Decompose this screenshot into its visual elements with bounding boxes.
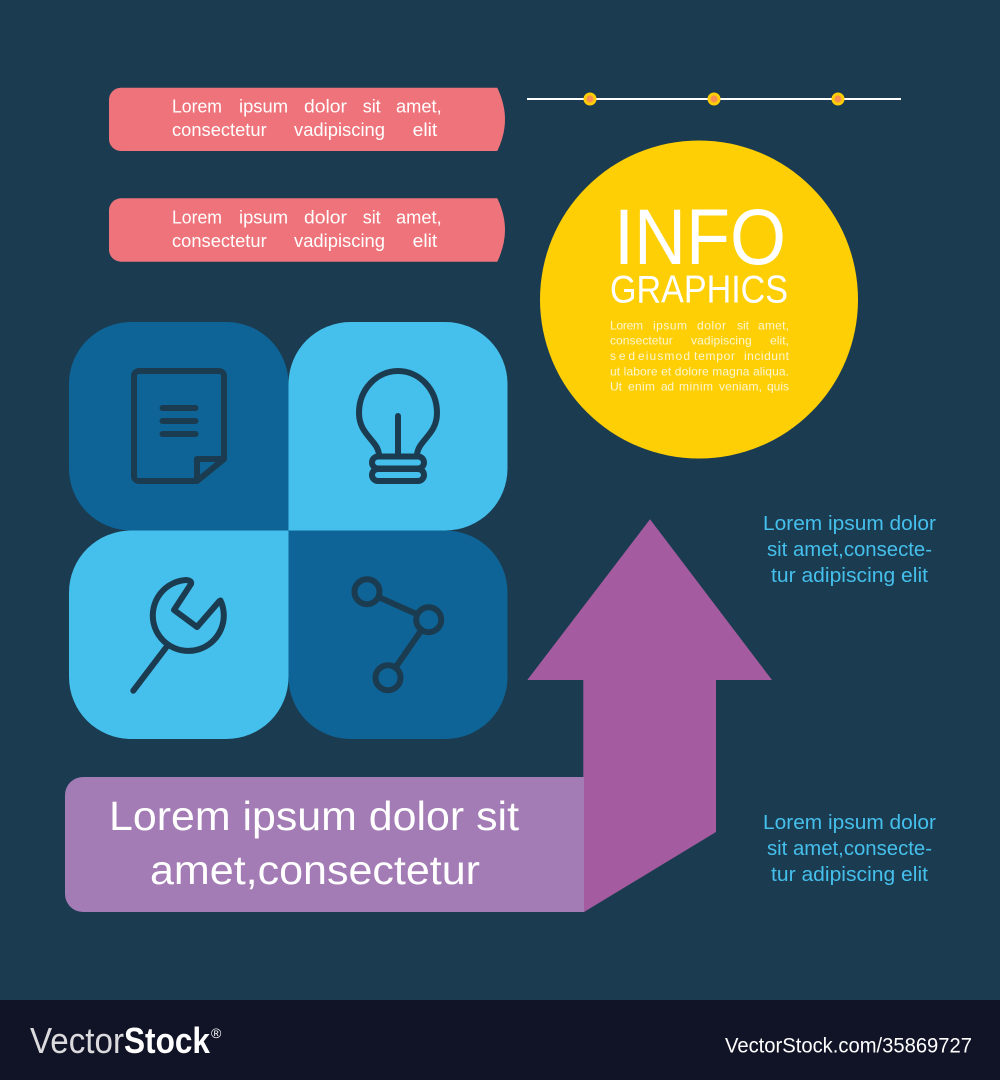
circle body text: dolor bbox=[697, 318, 726, 332]
circle body text: ut labore et dolore magna aliqua. bbox=[610, 364, 789, 378]
banner: top pink text bar: vadipiscing bbox=[294, 120, 385, 140]
image id: VectorStock.com/35869727 bbox=[725, 1035, 972, 1058]
circle body text: incidunt bbox=[744, 349, 790, 363]
circle body text: sed bbox=[610, 349, 635, 363]
circle body text: vadipiscing bbox=[691, 334, 752, 348]
logo wordmark: ® bbox=[211, 1025, 222, 1041]
banner: second pink text bar bbox=[109, 198, 505, 262]
banner: top pink text bar: ipsum bbox=[239, 97, 288, 117]
banner: purple lower label bbox=[65, 777, 584, 912]
footer bar bbox=[0, 1000, 1000, 1080]
banner: second pink text bar: vadipiscing bbox=[294, 231, 385, 251]
circle body text: tempor bbox=[694, 349, 735, 363]
icon: wrench bbox=[133, 580, 224, 691]
circle body text: consectetur bbox=[610, 334, 673, 348]
circle body text: eiusmod bbox=[638, 349, 690, 363]
subtitle: GRAPHICS: GRAPHICS bbox=[610, 269, 788, 312]
banner: second pink text bar: Lorem bbox=[172, 208, 222, 228]
banner: second pink text bar: ipsum bbox=[239, 208, 288, 228]
banner: top pink text bar: elit bbox=[413, 120, 437, 140]
banner: second pink text bar: elit bbox=[413, 231, 437, 251]
banner: second pink text bar: consectetur bbox=[172, 231, 267, 251]
banner: top pink text bar bbox=[109, 88, 505, 151]
panel: share nodes tile bbox=[288, 530, 508, 739]
circle body text: amet, bbox=[758, 318, 789, 332]
text block: upper blue caption: tur adipiscing elit bbox=[771, 565, 928, 587]
title: INFO: INFO bbox=[614, 192, 786, 281]
circle body text: ad bbox=[661, 380, 674, 394]
text block: upper blue caption bbox=[763, 513, 936, 587]
icon: document bbox=[134, 371, 224, 481]
logo wordmark: Stock bbox=[124, 1020, 211, 1061]
circle body text: enim bbox=[628, 380, 655, 394]
banner: top pink text bar: sit bbox=[363, 97, 381, 117]
banner: second pink text bar: dolor bbox=[304, 208, 347, 228]
icon: share nodes bbox=[354, 579, 441, 690]
circle body text: ipsum bbox=[653, 318, 687, 332]
panel: wrench tile bbox=[69, 530, 288, 739]
banner: top pink text bar: amet, bbox=[396, 97, 442, 117]
circle body text bbox=[610, 318, 790, 394]
circle body text: sit bbox=[737, 318, 750, 332]
banner: second pink text bar: amet, bbox=[396, 208, 442, 228]
text block: lower blue caption bbox=[763, 812, 936, 886]
circle body text: quis bbox=[767, 380, 789, 394]
circle body text: Lorem bbox=[610, 318, 643, 332]
logo wordmark: Vector bbox=[30, 1020, 124, 1061]
timeline with three dots bbox=[527, 92, 901, 106]
banner: top pink text bar: Lorem bbox=[172, 97, 222, 117]
circle body text: Ut bbox=[610, 380, 623, 394]
text block: upper blue caption: Lorem ipsum dolor bbox=[763, 513, 936, 535]
banner: second pink text bar: sit bbox=[363, 208, 381, 228]
panel: yellow title circle bbox=[540, 140, 858, 458]
text block: lower blue caption: sit amet,consecte- bbox=[767, 838, 932, 860]
text block: lower blue caption: tur adipiscing elit bbox=[771, 864, 928, 886]
circle body text: minim bbox=[679, 380, 713, 394]
banner: purple lower label: Lorem ipsum dolor sit bbox=[109, 793, 520, 839]
logo wordmark bbox=[30, 1020, 222, 1061]
banner: top pink text bar: dolor bbox=[304, 97, 347, 117]
arrow: purple upward arrow bbox=[527, 519, 772, 912]
panel: lightbulb tile bbox=[288, 322, 508, 530]
panel: document tile bbox=[69, 322, 288, 530]
banner: top pink text bar: consectetur bbox=[172, 120, 267, 140]
circle body text: veniam, bbox=[719, 380, 762, 394]
circle body text: elit, bbox=[770, 334, 789, 348]
banner: purple lower label: amet,consectetur bbox=[150, 847, 480, 893]
icon: lightbulb bbox=[359, 371, 437, 481]
text block: upper blue caption: sit amet,consecte- bbox=[767, 539, 932, 561]
text block: lower blue caption: Lorem ipsum dolor bbox=[763, 812, 936, 834]
